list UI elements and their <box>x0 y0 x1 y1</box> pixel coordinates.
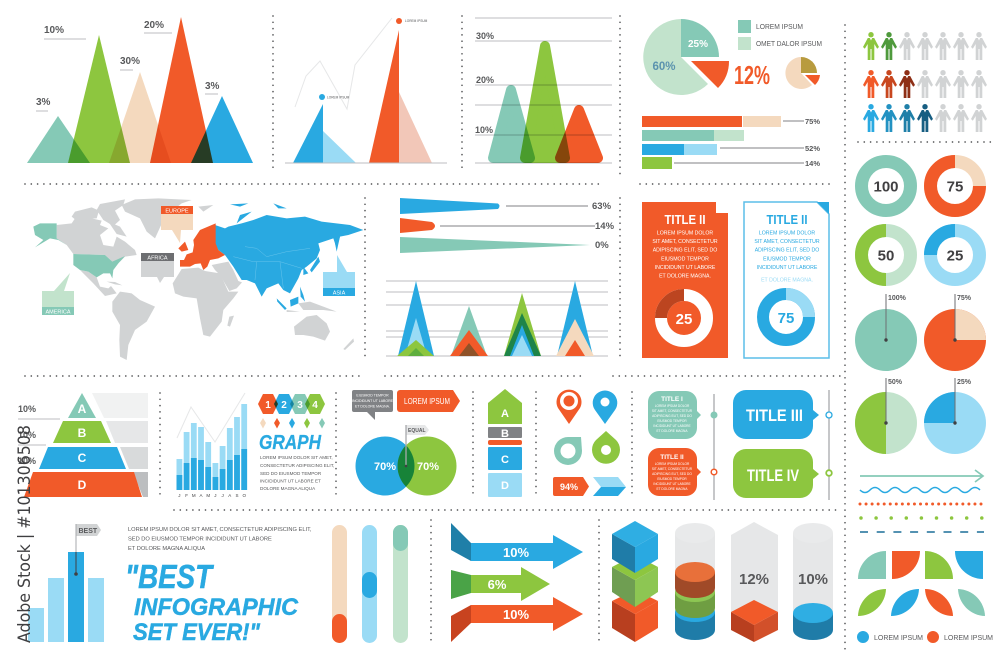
timeline small bubbles: SIT AMET, CONSECTETUR <box>652 467 693 471</box>
chart: half triangles with line <box>285 18 447 163</box>
pie gauges with pointers: 75% <box>957 295 972 302</box>
funnel bars <box>400 198 615 253</box>
timeline large bubbles: TITLE III <box>746 406 803 425</box>
chart: rounded mountains: 20% <box>476 75 494 85</box>
intro text block <box>128 527 312 552</box>
chart: overlapping triangles: 20% <box>144 20 164 31</box>
pie charts with legend: 25% <box>688 39 708 50</box>
card: orange title II: TITLE II <box>664 212 706 227</box>
world map <box>33 198 363 360</box>
callout: Europe: EUROPE <box>165 208 189 214</box>
card: blue title II <box>744 202 829 358</box>
stacked letter tags: D <box>501 480 509 492</box>
hexagon steps and graph title: INCIDIDUNT UT LABORE ET <box>260 478 321 484</box>
intro text block: SED DO EIUSMOD TEMPOR INCIDIDUNT UT LABORE <box>128 536 272 542</box>
headline: "BEST <box>125 558 214 595</box>
donut gauges: 75 <box>947 178 963 196</box>
bar chart with months: A <box>199 493 203 498</box>
bar chart with months: S <box>235 493 239 498</box>
headline: SET EVER!" <box>133 619 261 646</box>
bar chart with months <box>176 393 247 498</box>
card: orange title II: ET DOLORE MAGNA. <box>659 274 711 280</box>
map pins and drops: 94% <box>560 482 578 492</box>
hexagon steps and graph title: SED DO EIUSMOD TEMPOR <box>260 471 322 476</box>
intro text block: LOREM IPSUM DOLOR SIT AMET, CONSECTETUR ADIPISCING ELIT, <box>128 527 312 533</box>
hexagon steps and graph title: 1 <box>265 400 271 411</box>
hexagonal column 12% <box>731 522 778 642</box>
chart: rounded mountains: 30% <box>476 31 494 41</box>
bar chart with months: O <box>242 493 246 498</box>
timeline small bubbles: LOREM IPSUM DOLOR <box>655 404 690 408</box>
bar chart with months: M <box>206 493 210 498</box>
timeline large bubbles <box>733 390 832 500</box>
chart: rounded mountains: 10% <box>475 125 493 135</box>
bar chart with months: J <box>214 493 217 498</box>
hexagon steps and graph title <box>258 394 334 491</box>
best bar chart <box>28 524 104 642</box>
callout: America <box>42 273 74 316</box>
chart: half triangles with line: LOREM IPSUM <box>405 19 428 23</box>
card: blue title II: EIUSMOD TEMPOR <box>763 256 811 262</box>
timeline small bubbles: INCIDIDUNT UT LABORE <box>653 482 691 486</box>
card: blue title II: INCIDIDUNT UT LABORE <box>757 265 818 271</box>
quarter and leaf shapes <box>858 551 985 616</box>
hexagon steps and graph title: 3 <box>297 400 303 411</box>
callout: Africa <box>141 253 174 283</box>
donut gauges <box>862 162 980 280</box>
stacked letter tags: C <box>501 454 509 466</box>
card: orange title II: SIT AMET, CONSECTETUR <box>652 239 718 245</box>
card: orange title II: ADIPISCING ELIT, SED DO <box>653 248 717 254</box>
nested triangle chart <box>386 281 608 356</box>
pie charts with legend: OMET DALOR IPSUM <box>756 41 822 48</box>
pyramid: 10% <box>18 430 36 440</box>
pie charts with legend: LOREM IPSUM <box>756 24 803 31</box>
pie charts with legend: 60% <box>652 61 676 73</box>
headline: INFOGRAPHIC <box>134 594 299 621</box>
speech bubble and tag: EIUSMOD TEMPOR <box>356 394 389 398</box>
pyramid: 10% <box>18 456 36 466</box>
best bar chart: BEST <box>78 528 98 535</box>
isometric cubes <box>612 521 658 642</box>
pyramid: B <box>78 426 87 440</box>
stacked horizontal bars <box>642 116 820 169</box>
legend: LOREM IPSUM <box>874 635 923 642</box>
decorative line styles <box>860 470 984 532</box>
pie charts with legend <box>643 19 822 95</box>
speech bubble and tag: ET DOLORE MAGNA. <box>355 404 390 408</box>
folded arrows: 10% <box>503 607 529 622</box>
bar chart with months: M <box>192 493 196 498</box>
funnel bars: 63% <box>592 201 612 212</box>
card: blue title II: 75 <box>778 310 794 327</box>
hexagonal column 12%: 12% <box>739 571 769 588</box>
headline <box>125 558 299 646</box>
chart: overlapping triangles: 3% <box>205 81 220 92</box>
callout: Africa: AFRICA <box>147 256 168 262</box>
folded arrows: 10% <box>503 545 529 560</box>
folded arrows <box>451 523 583 642</box>
card: blue title II: LOREM IPSUM DOLOR <box>759 230 815 236</box>
callout: Asia <box>323 255 355 296</box>
donut gauges: 100 <box>873 178 899 196</box>
hexagon steps and graph title: 2 <box>281 400 287 411</box>
bar chart with months: J <box>221 493 224 498</box>
bar chart with months: F <box>185 493 188 498</box>
card: blue title II: SIT AMET, CONSECTETUR <box>754 239 820 245</box>
pyramid: D <box>78 478 87 492</box>
cylinder 10% <box>793 523 833 640</box>
pyramid: A <box>78 402 87 416</box>
venn diagram: EQUAL <box>408 428 426 434</box>
legend <box>857 631 993 643</box>
legend: LOREM IPSUM <box>944 635 993 642</box>
map pins and drops <box>553 390 626 496</box>
funnel bars: 0% <box>595 240 609 251</box>
pie gauges with pointers: 25% <box>957 379 972 386</box>
timeline small bubbles: SIT AMET, CONSECTETUR <box>652 409 693 413</box>
callout: America: AMERICA <box>45 310 71 316</box>
chart: overlapping triangles: 10% <box>44 25 64 36</box>
timeline small bubbles: TITLE I <box>661 396 683 403</box>
card: orange title II: EIUSMOD TEMPOR <box>661 256 709 262</box>
intro text block: ET DOLORE MAGNA ALIQUA <box>128 546 205 552</box>
bar chart with months: A <box>228 493 231 498</box>
timeline small bubbles: LOREM IPSUM DOLOR <box>655 462 690 466</box>
chart: rounded mountains <box>475 18 612 163</box>
stacked horizontal bars: 14% <box>805 159 820 168</box>
card: blue title II: TITLE II <box>766 212 808 227</box>
stacked horizontal bars: 52% <box>805 144 820 153</box>
pie gauges with pointers: 100% <box>888 295 907 302</box>
speech bubble and tag: INCIDIDUNT UT LABORE <box>352 399 394 403</box>
stacked letter tags <box>488 389 522 497</box>
timeline small bubbles: ADIPISCING ELIT, SED DO <box>652 414 692 418</box>
timeline small bubbles: TITLE II <box>660 454 684 461</box>
speech bubble and tag: LOREM IPSUM <box>404 397 450 406</box>
layered cylinder <box>675 523 715 640</box>
callout: Europe <box>161 206 193 243</box>
funnel bars: 14% <box>595 221 615 232</box>
pyramid: C <box>78 451 87 465</box>
timeline small bubbles: EIUSMOD TEMPOR <box>657 477 687 481</box>
donut gauges: 50 <box>878 248 894 264</box>
timeline small bubbles: ADIPISCING ELIT, SED DO <box>652 472 692 476</box>
vertical sliders <box>332 525 408 643</box>
chart: half triangles with line: LOREM IPSUM <box>327 96 350 100</box>
pyramid <box>18 393 148 497</box>
card: blue title II: ET DOLORE MAGNA. <box>761 278 813 284</box>
people pictogram <box>863 32 987 132</box>
cylinder 10%: 10% <box>798 571 828 588</box>
hexagon steps and graph title: GRAPH <box>259 432 321 454</box>
stacked horizontal bars: 75% <box>805 117 820 126</box>
card: orange title II: INCIDIDUNT UT LABORE <box>655 265 716 271</box>
donut gauges: 25 <box>947 248 963 264</box>
chart: overlapping triangles: 30% <box>120 56 140 67</box>
timeline small bubbles: EIUSMOD TEMPOR <box>657 419 687 423</box>
venn diagram: 70% <box>417 461 439 473</box>
vertical stock credit: Adobe Stock | #101306508 <box>15 425 34 643</box>
pie charts with legend: 12% <box>734 60 770 90</box>
chart: overlapping triangles: 3% <box>36 97 51 108</box>
pie gauges with pointers <box>855 294 986 454</box>
timeline small bubbles <box>648 391 718 500</box>
stacked letter tags: B <box>501 428 509 440</box>
card: blue title II: ADIPISCING ELIT, SED DO <box>755 248 819 254</box>
hexagon steps and graph title: CONSECTETUR ADIPISCING ELIT, <box>260 463 334 468</box>
timeline small bubbles: ET DOLORE MAGNA <box>657 429 688 433</box>
card: orange title II <box>642 202 728 358</box>
hexagon steps and graph title: DOLORE MAGNA ALIQUA <box>260 486 316 491</box>
stacked letter tags: A <box>501 408 509 420</box>
timeline small bubbles: ET DOLORE MAGNA <box>657 487 688 491</box>
speech bubble and tag <box>352 390 460 420</box>
timeline large bubbles: TITLE IV <box>747 466 800 485</box>
pyramid: 10% <box>18 404 36 414</box>
timeline small bubbles: INCIDIDUNT UT LABORE <box>653 424 691 428</box>
card: orange title II: LOREM IPSUM DOLOR <box>657 230 713 236</box>
card: orange title II: 25 <box>676 311 692 328</box>
chart: overlapping triangles <box>27 17 253 163</box>
venn diagram <box>356 425 456 496</box>
folded arrows: 6% <box>488 577 507 592</box>
hexagon steps and graph title: 4 <box>312 400 318 411</box>
hexagon steps and graph title: LOREM IPSUM DOLOR SIT AMET, <box>260 455 333 460</box>
pie gauges with pointers: 50% <box>888 379 903 386</box>
bar chart with months: J <box>178 493 181 498</box>
callout: Asia: ASIA <box>333 290 346 296</box>
venn diagram: 70% <box>374 461 396 473</box>
